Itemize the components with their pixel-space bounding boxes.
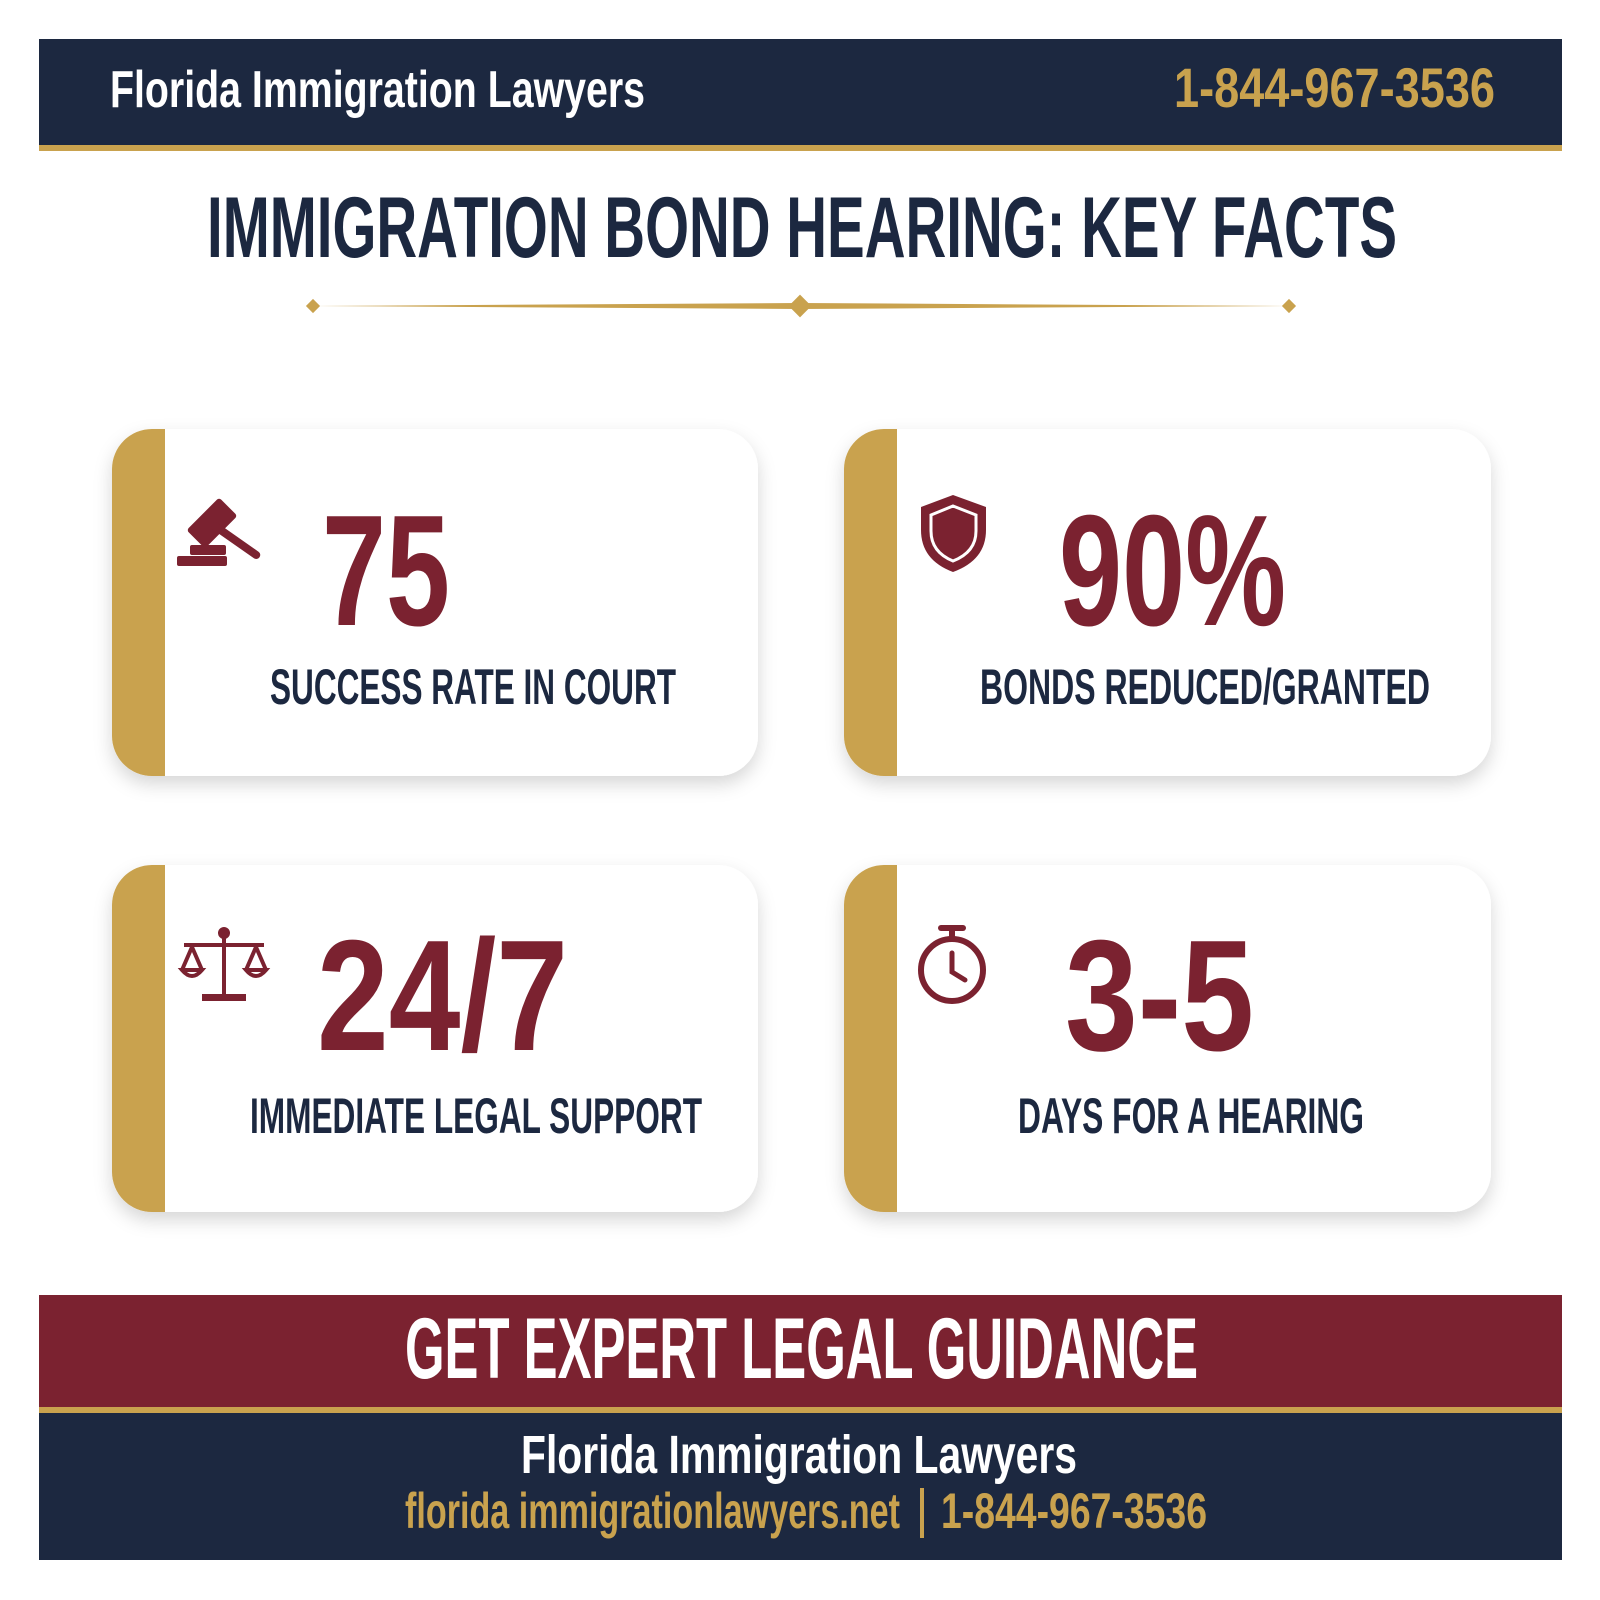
footer contact: florida immigrationlawyers.net [405,1483,900,1539]
card: 90% bonds: 90% [1059,483,1286,659]
icon: gavel [177,498,262,566]
icon: shield [921,495,986,572]
card: 3-5 days: DAYS FOR A HEARING [1018,1088,1364,1144]
card: 24/7 support: 24/7 [317,908,568,1084]
card: 3-5 days [844,865,1491,1212]
card: 3-5 days: 3-5 [1065,908,1254,1084]
card: 24/7 support [112,865,758,1212]
icon: stopwatch [921,928,983,1001]
card: 24/7 support: IMMEDIATE LEGAL SUPPORT [250,1088,702,1144]
divider ornament [306,295,1296,317]
footer contact [39,1407,1562,1560]
card: 75 success rate [112,429,758,776]
footer contact: Florida Immigration Lawyers [521,1425,1077,1485]
footer contact: 1-844-967-3536 [941,1483,1207,1539]
header bar [39,39,1562,151]
call to action banner [39,1295,1562,1407]
card: 75 success rate: SUCCESS RATE IN COURT [270,659,676,715]
card: 75 success rate: 75 [322,483,450,659]
header bar: Florida Immigration Lawyers [110,61,645,119]
icon: scales of justice [182,929,266,1001]
card: 90% bonds [844,429,1491,776]
header bar: 1-844-967-3536 [1174,56,1495,119]
